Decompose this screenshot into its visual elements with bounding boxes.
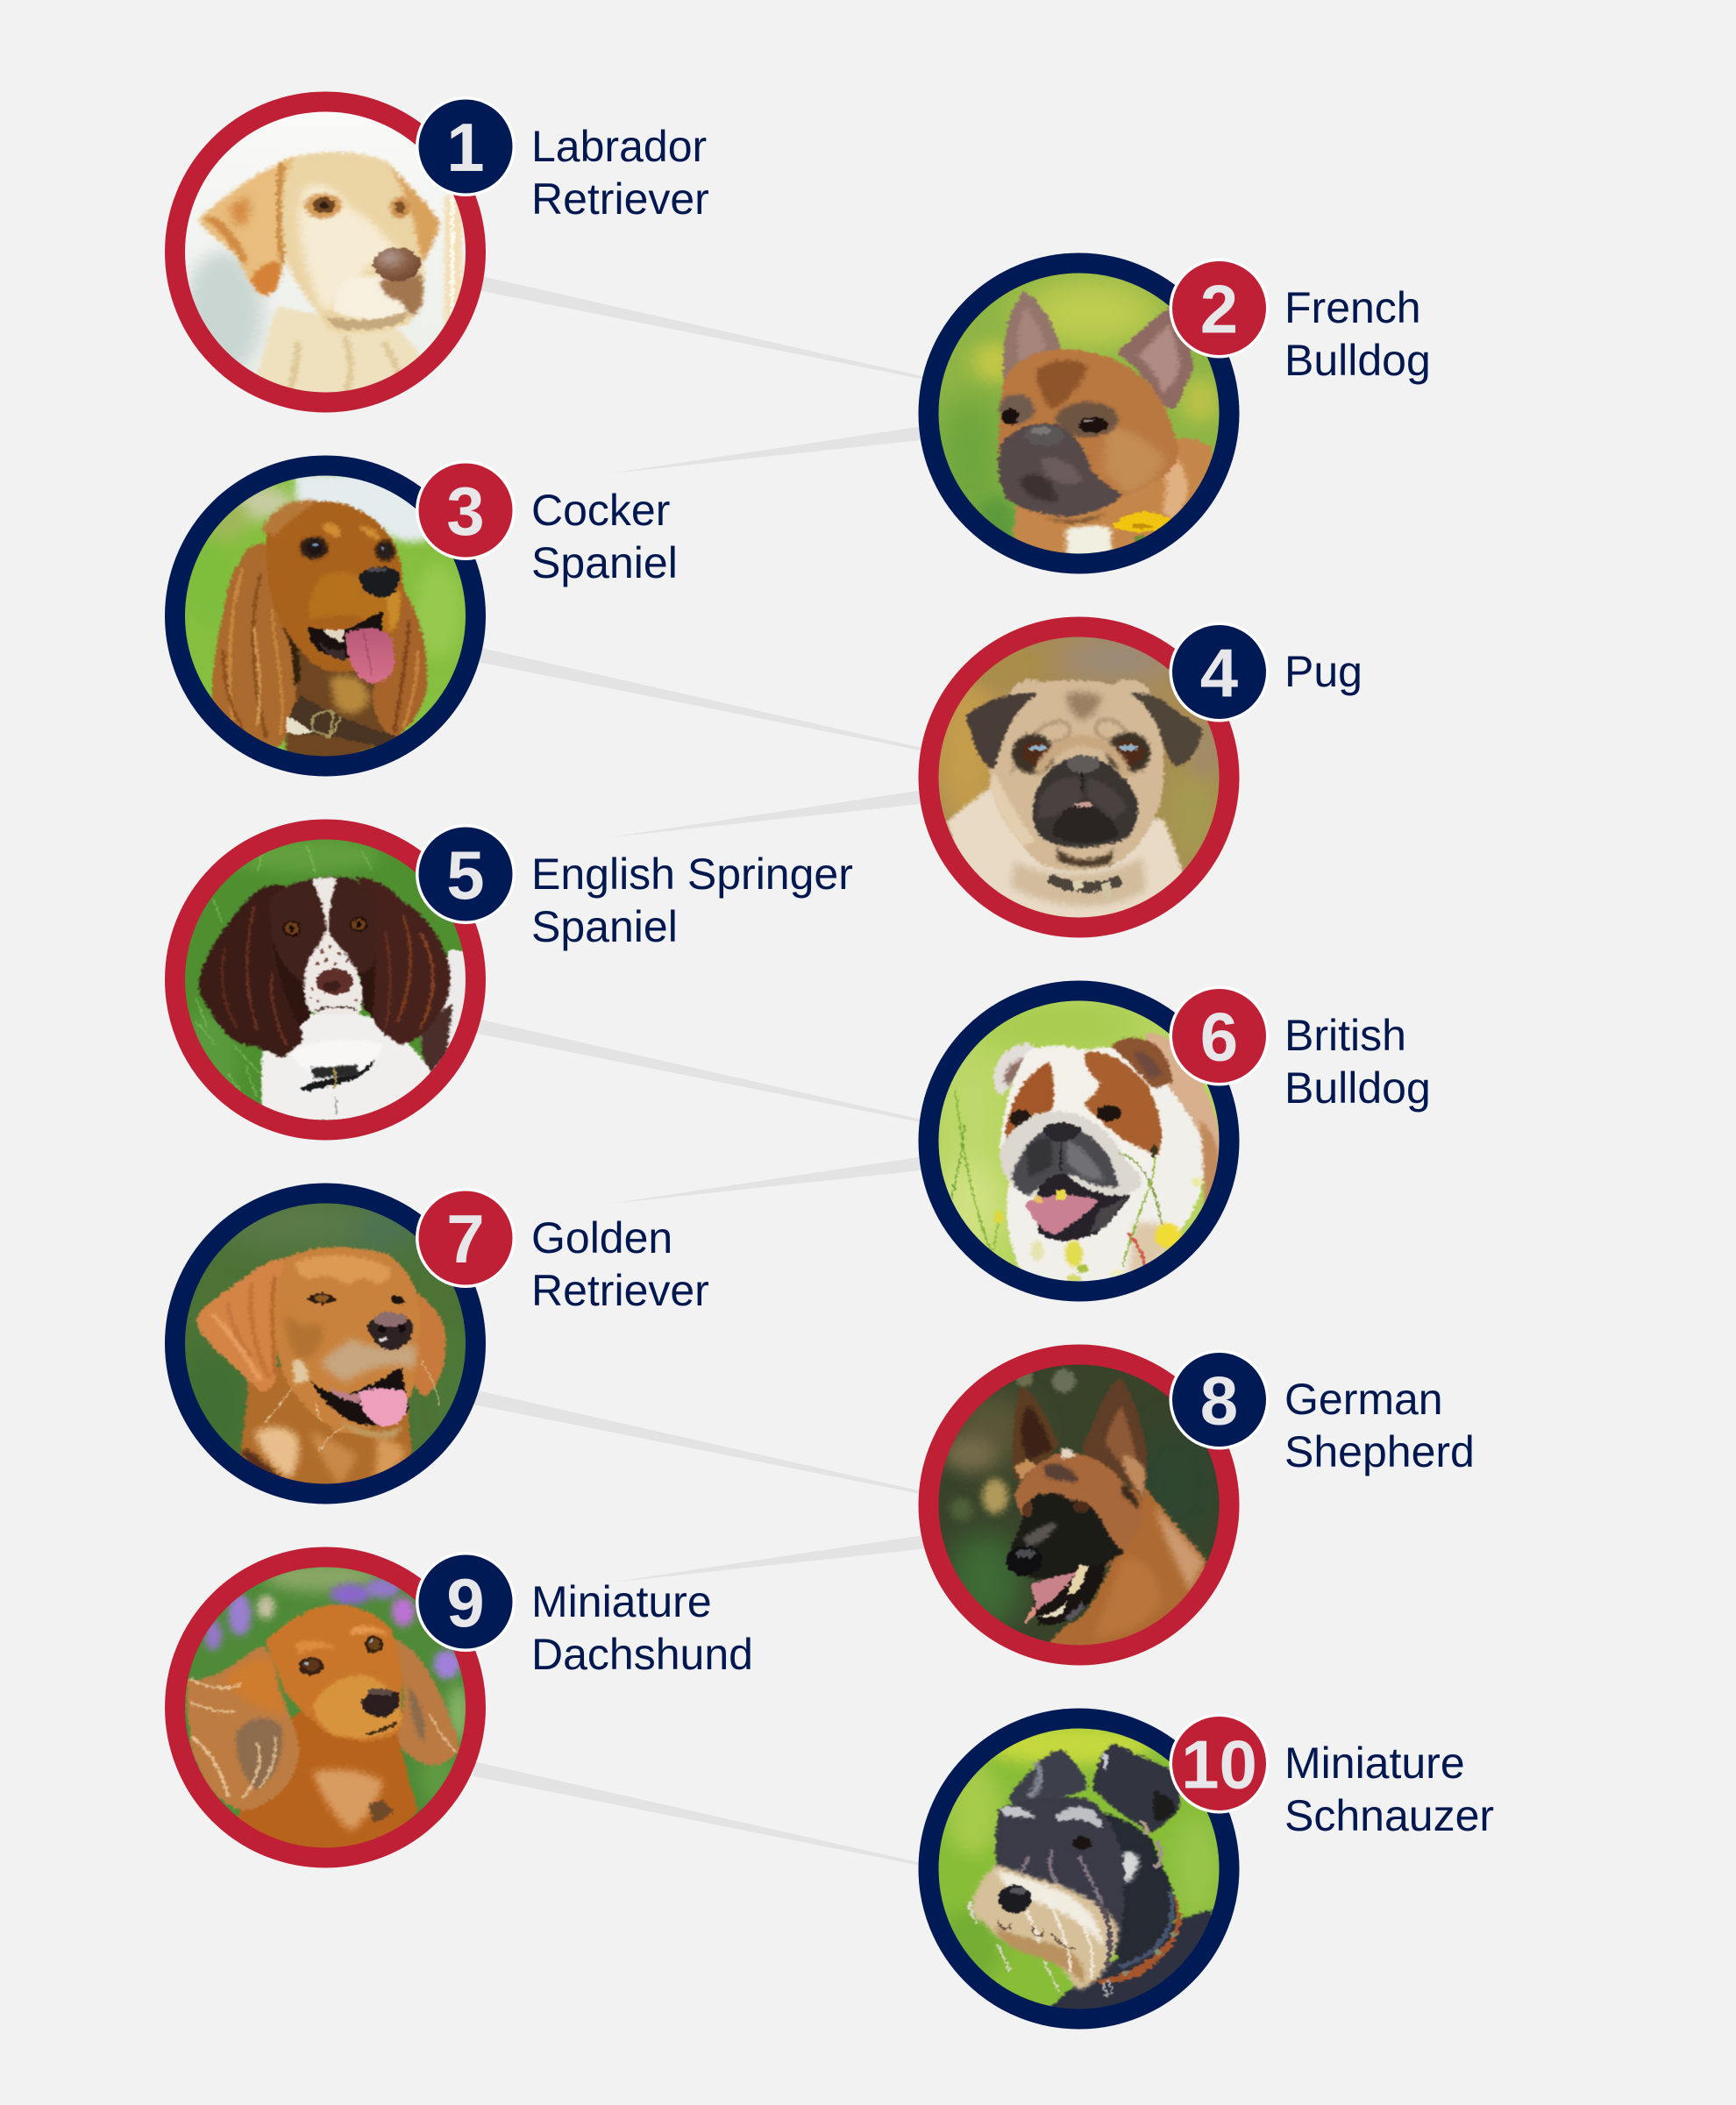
connector: 4 to 5 <box>609 789 929 837</box>
ring <box>928 627 1229 928</box>
badge: 7: 7 <box>446 1200 485 1277</box>
panel: rank 3 Cocker Spaniel <box>173 460 678 769</box>
badge: 1: 1 <box>446 109 485 186</box>
badge: 8 <box>1170 1350 1270 1450</box>
photo: British Bulldog <box>938 1001 1219 1282</box>
badge: 10 <box>1170 1713 1270 1813</box>
badge: 6: 6 <box>1200 998 1238 1075</box>
label: Pug <box>1284 647 1362 696</box>
label: Spaniel <box>531 538 678 587</box>
ring <box>175 466 475 766</box>
badge: 6 <box>1170 985 1270 1085</box>
badge: 4: 4 <box>1200 635 1238 712</box>
photo: Labrador Retriever <box>186 149 465 393</box>
badge: 9 <box>416 1552 516 1652</box>
label: Shepherd <box>1284 1427 1475 1476</box>
ring <box>928 991 1229 1291</box>
connector: 6 to 7 <box>609 1156 929 1204</box>
label: Retriever <box>531 1266 709 1315</box>
badge: 7 <box>416 1188 516 1288</box>
label: British <box>1284 1011 1406 1060</box>
ring <box>928 263 1229 564</box>
label: Labrador <box>531 122 707 171</box>
label: Bulldog <box>1284 1063 1431 1113</box>
badge: 2: 2 <box>1200 270 1238 347</box>
connector: 1 to 2 <box>473 274 929 380</box>
photo: German Shepherd <box>938 1364 1219 1645</box>
badge: 8: 8 <box>1200 1362 1238 1440</box>
badge: 2 <box>1170 258 1270 358</box>
label: Cocker <box>531 486 670 535</box>
ring <box>175 829 475 1130</box>
ring <box>175 1193 475 1494</box>
label: Dachshund <box>531 1630 753 1679</box>
panel: rank 2 French Bulldog <box>919 252 1428 573</box>
panel: rank 6 British Bulldog <box>927 985 1431 1295</box>
label: Bulldog <box>1284 336 1431 385</box>
badge: 3: 3 <box>446 473 485 550</box>
photo: French Bulldog <box>938 274 1219 554</box>
badge: 3 <box>416 460 516 560</box>
photo: Golden Retriever <box>185 1203 466 1483</box>
photo: Cocker Spaniel <box>185 475 466 756</box>
badge: 1 <box>416 96 516 196</box>
connector: 5 to 6 <box>473 1018 929 1124</box>
connector: 2 to 3 <box>609 425 929 473</box>
ring <box>175 102 475 402</box>
panel: rank 5 English Springer Spaniel <box>173 824 853 1133</box>
photo: English Springer Spaniel <box>185 840 466 1120</box>
label: Spaniel <box>531 902 678 951</box>
ring <box>928 1718 1229 2019</box>
badge: 5: 5 <box>446 836 485 914</box>
panel: rank 10 Miniature Schnauzer <box>919 1708 1494 2029</box>
badge: 4 <box>1170 622 1270 722</box>
connector: 8 to 9 <box>609 1534 929 1582</box>
panel: rank 8 German Shepherd <box>927 1350 1475 1659</box>
label: English Springer <box>531 850 853 899</box>
photo: Miniature Schnauzer <box>938 1729 1219 2009</box>
label: French <box>1284 283 1421 332</box>
label: Miniature <box>1284 1739 1465 1788</box>
label: German <box>1284 1375 1443 1424</box>
badge: 10: 10 <box>1181 1725 1257 1803</box>
badge: 5 <box>416 824 516 924</box>
connector: 9 to 10 <box>473 1761 929 1867</box>
label: Schnauzer <box>1284 1791 1494 1840</box>
connector: 3 to 4 <box>473 646 929 752</box>
connector: 7 to 8 <box>473 1390 929 1496</box>
label: Retriever <box>531 174 709 224</box>
ring <box>928 1355 1229 1655</box>
label: Golden <box>531 1213 672 1262</box>
photo: Pug <box>938 636 1219 917</box>
ring <box>175 1557 475 1858</box>
panel: rank 1 Labrador Retriever <box>165 91 708 412</box>
label: Miniature <box>531 1577 712 1626</box>
panel: rank 4 Pug <box>927 622 1362 931</box>
badge: 9: 9 <box>446 1564 485 1641</box>
panel: rank 9 Miniature Dachshund <box>173 1552 753 1860</box>
panel: rank 7 Golden Retriever <box>173 1188 709 1497</box>
photo: Miniature Dachshund <box>185 1568 466 1848</box>
